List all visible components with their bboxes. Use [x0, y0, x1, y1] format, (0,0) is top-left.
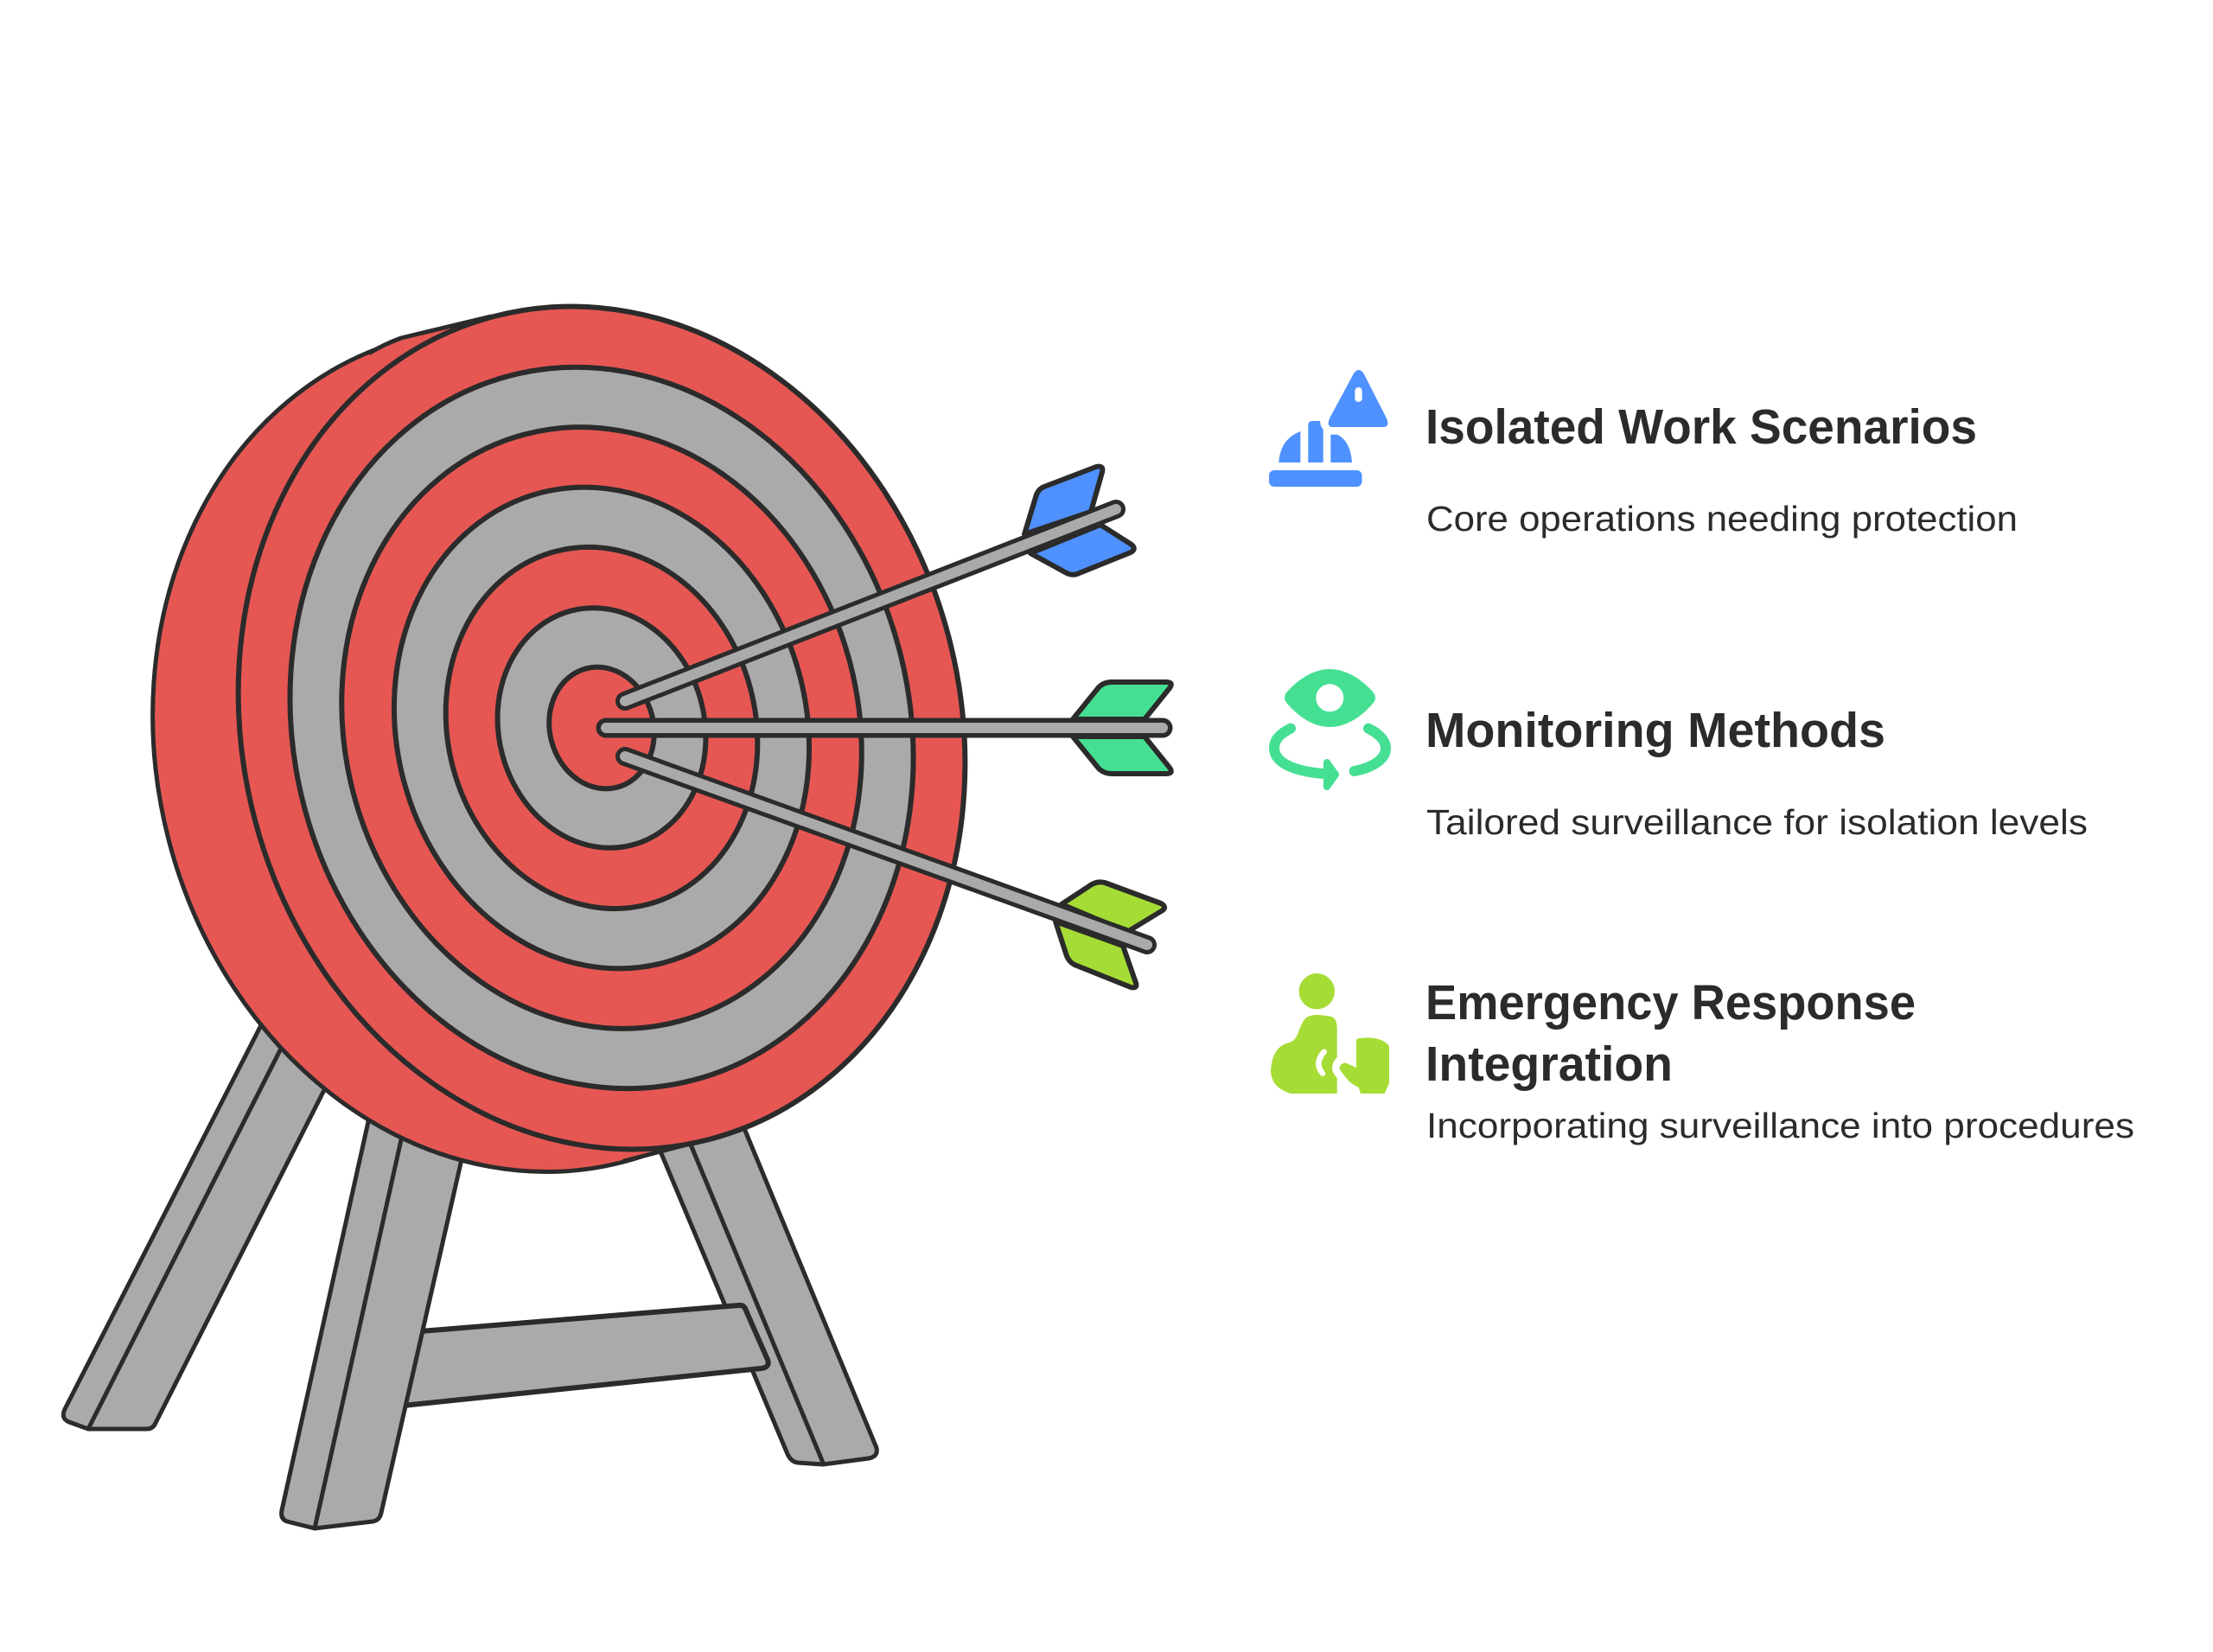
heading: emergency response integration [1425, 975, 1916, 1092]
arrow: blue [625, 467, 1134, 701]
middle leg [282, 1118, 462, 1528]
crossbar [403, 1305, 768, 1406]
text: incorporating surveillance: Incorporating surveillance into procedures [1426, 1106, 2134, 1145]
heading: isolated work scenarios: Isolated Work Scenarios [1425, 399, 1977, 455]
target illustration [61, 226, 1056, 1528]
icon: person with hand [1271, 973, 1389, 1094]
heading: monitoring methods: Monitoring Methods [1425, 703, 1885, 758]
text: core operations: Core operations needing protection [1426, 499, 2018, 539]
blue arrow shaft [625, 509, 1116, 701]
left leg [63, 1022, 326, 1429]
icon: eye with rotation arrow [1274, 669, 1386, 787]
blue fletching [1024, 467, 1134, 575]
heading: emergency response integration: Emergency Response [1425, 975, 1916, 1030]
icon: hard hat and warning triangle [1269, 370, 1387, 487]
green arrow shaft [606, 718, 1163, 738]
right leg [660, 1126, 877, 1464]
lime arrow shaft [625, 756, 1147, 945]
lime fletching [1055, 882, 1164, 987]
target front rings [147, 226, 1056, 1230]
arrow: green [606, 682, 1171, 774]
green fletching [1073, 682, 1171, 774]
text: tailored surveillance: Tailored surveillance for isolation levels [1426, 802, 2088, 842]
arrow: lime [625, 756, 1164, 987]
back of target disc [61, 248, 971, 1253]
heading: emergency response integration: Integration [1425, 1036, 1673, 1092]
